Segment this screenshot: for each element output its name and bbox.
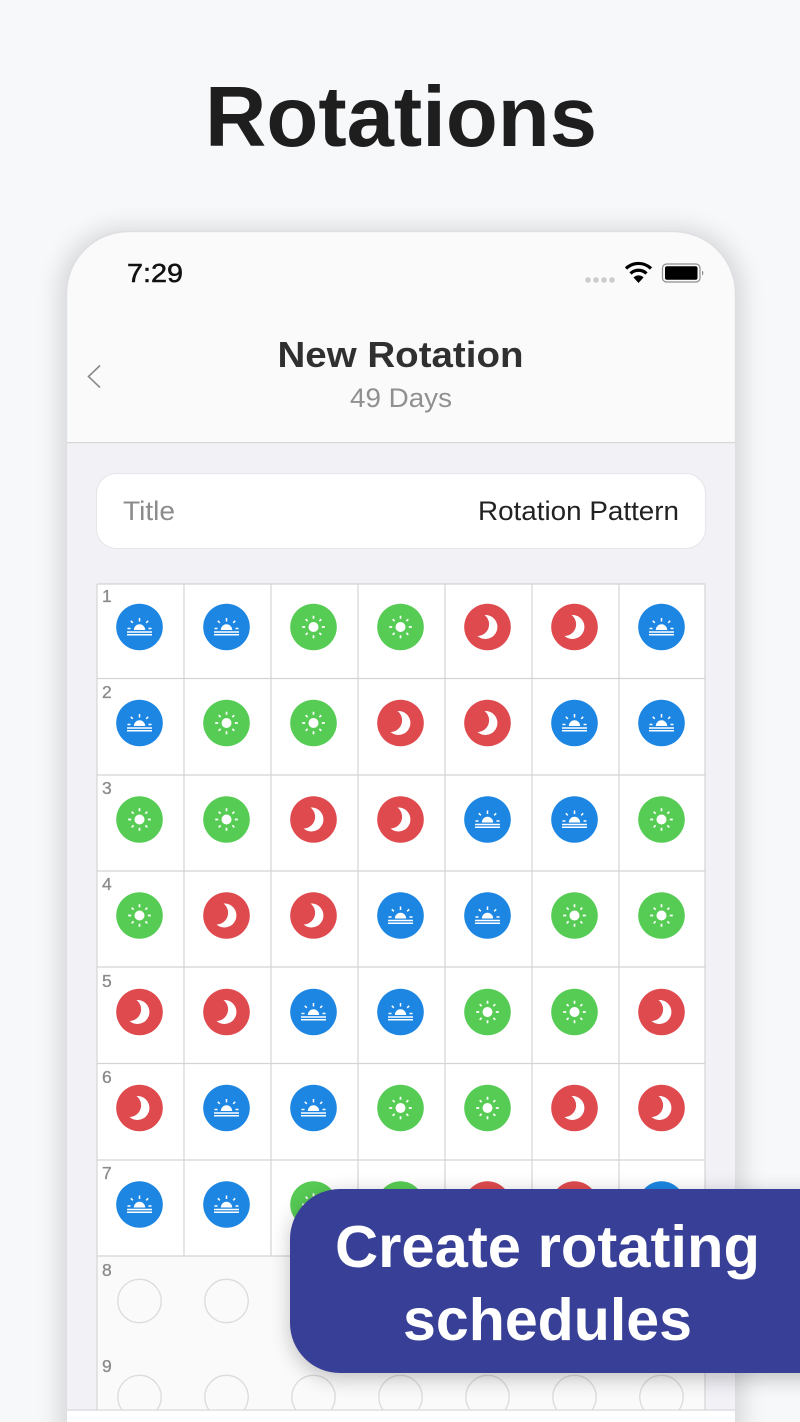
row 8 (empty) <box>102 1260 683 1323</box>
back chevron <box>88 366 100 388</box>
row 1: 1 <box>102 586 112 606</box>
status bar: wifi icon <box>626 263 651 283</box>
row 6 <box>102 1067 685 1131</box>
row 9 (empty) <box>102 1356 683 1419</box>
field label: Title <box>123 496 175 526</box>
row 1 <box>102 586 685 650</box>
phone body <box>66 232 736 1422</box>
row 3 <box>102 778 685 843</box>
screen heading: New Rotation <box>278 334 524 375</box>
day count subtitle: 49 Days <box>350 383 452 413</box>
row 9 (empty): 9 <box>102 1356 112 1376</box>
callout text line 1: Create rotating <box>335 1214 760 1280</box>
row 5: 5 <box>102 971 112 991</box>
header divider <box>67 442 735 443</box>
callout shadow <box>290 1193 800 1379</box>
row 6: 6 <box>102 1067 112 1087</box>
filled cells background <box>97 584 705 1256</box>
rotation grid <box>97 584 705 1419</box>
row 5 <box>102 971 685 1035</box>
title field card <box>96 474 706 548</box>
content background <box>67 443 735 1422</box>
status bar: time: 7:29 <box>127 260 183 288</box>
status bar: battery icon <box>662 264 703 282</box>
row 4: 4 <box>102 874 112 894</box>
bottom bar <box>67 1410 735 1422</box>
row 7 <box>102 1163 685 1228</box>
status bar: signal dots <box>585 277 615 283</box>
empty rows background <box>97 1256 705 1410</box>
field value: Rotation Pattern <box>478 496 679 526</box>
row 4 <box>102 874 685 939</box>
phone shadow <box>59 228 743 1422</box>
row 3: 3 <box>102 778 112 798</box>
row 2: 2 <box>102 682 112 702</box>
title: Rotations <box>205 70 597 165</box>
callout <box>290 1189 800 1373</box>
phone screen <box>66 232 736 1422</box>
row 2 <box>102 682 685 746</box>
row 7: 7 <box>102 1163 112 1183</box>
row 8 (empty): 8 <box>102 1260 112 1280</box>
callout text line 2: schedules <box>403 1287 692 1353</box>
